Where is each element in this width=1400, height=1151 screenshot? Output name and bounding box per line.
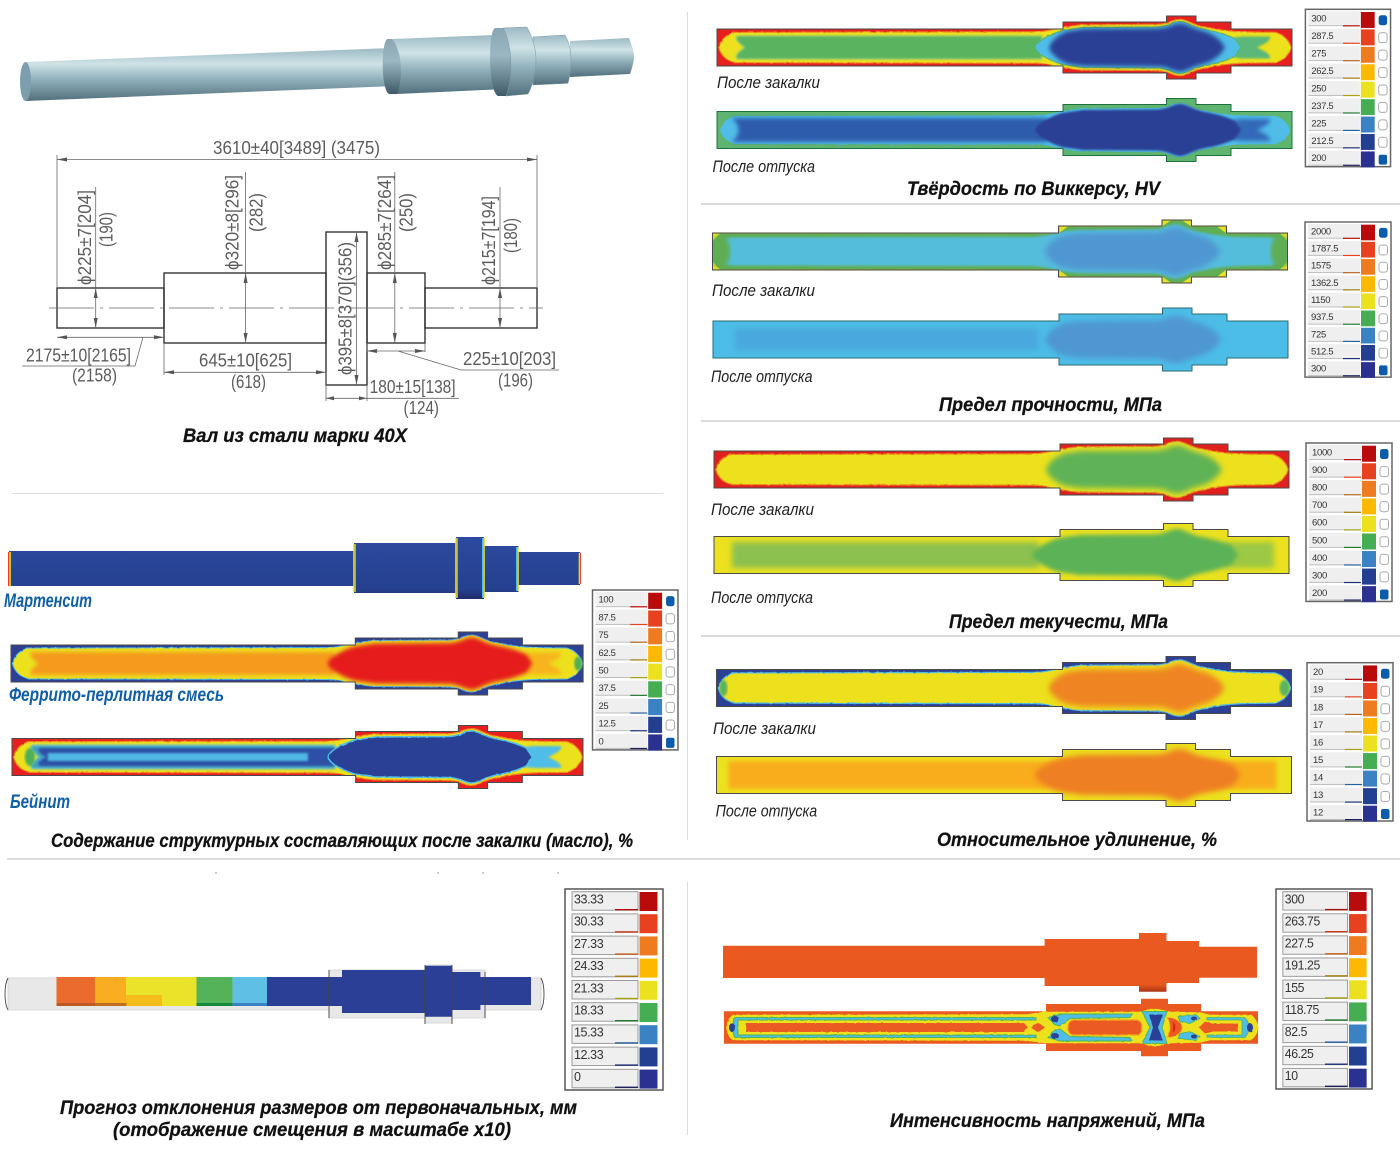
drawing outline — [49, 232, 543, 385]
legend: hardness: 275 — [1311, 48, 1326, 59]
map: yield strength after tempering — [714, 524, 1289, 586]
dimension labels: (190) — [96, 212, 116, 247]
dimension labels: ϕ285±7[264] — [375, 175, 395, 270]
legend: tensile strength: 725 — [1311, 328, 1326, 339]
map: elongation after tempering — [716, 744, 1292, 806]
legend: displacement: 33.33 — [574, 892, 604, 906]
dimension labels: 225±10[203] — [463, 349, 556, 369]
legend: structure percent: 62.5 — [598, 648, 616, 659]
dimension labels: (180) — [501, 218, 521, 253]
legend: stress intensity: 10 — [1285, 1069, 1298, 1083]
legend: hardness: 212.5 — [1311, 135, 1333, 146]
ghost of original shaft — [8, 965, 541, 1023]
map: stress intensity section — [724, 999, 1258, 1056]
legend: hardness — [1305, 9, 1391, 167]
map: elongation after quenching — [716, 656, 1292, 720]
legend: tensile strength: 1150 — [1311, 294, 1330, 305]
dimension labels: ϕ225±7[204] — [75, 190, 95, 285]
title: elongation: Относительное удлинение, % — [937, 830, 1217, 851]
legend: elongation: 20 — [1313, 667, 1323, 678]
legend: elongation: 14 — [1313, 772, 1323, 783]
legend: elongation: 15 — [1313, 755, 1323, 766]
legend: structure percent: 0 — [598, 736, 603, 747]
label: after quenching: После закалки — [712, 281, 815, 300]
map: tensile strength after tempering — [713, 308, 1288, 371]
legend: structure percent: 37.5 — [598, 683, 616, 694]
label: bainite: Бейнит — [10, 792, 70, 813]
legend: displacement: 0 — [574, 1070, 581, 1084]
legend: stress intensity: 118.75 — [1285, 1003, 1320, 1017]
legend: structure percent: 100 — [598, 595, 613, 606]
panel: martensite 3D map — [8, 537, 580, 599]
legend: yield strength: 500 — [1312, 535, 1327, 546]
legend: elongation — [1307, 663, 1393, 822]
legend: displacement: 27.33 — [574, 937, 604, 951]
dimension labels — [26, 138, 556, 418]
dimension labels: ϕ215±7[194] — [479, 196, 499, 285]
legend: yield strength: 1000 — [1312, 448, 1332, 459]
dimension labels: 645±10[625] — [199, 351, 292, 371]
legend: structure percent — [592, 590, 678, 751]
legend: stress intensity: 46.25 — [1285, 1047, 1314, 1061]
legend: structure percent: 12.5 — [598, 719, 616, 730]
dimension labels: 3610±40[3489] (3475) — [213, 138, 380, 158]
label: after quenching: После закалки — [713, 719, 816, 738]
legend: structure percent: 50 — [598, 665, 608, 677]
legend: yield strength: 400 — [1312, 553, 1327, 564]
legend: hardness: 200 — [1311, 152, 1326, 163]
legend: elongation: 13 — [1313, 790, 1323, 801]
map: tensile strength after quenching — [710, 220, 1290, 283]
subtitle: displacement scale: (отображение смещения в масштабе x10) — [113, 1120, 511, 1141]
label: after quenching: После закалки — [717, 73, 820, 92]
legend: yield strength — [1306, 443, 1392, 602]
dimension labels: (2158) — [72, 366, 117, 386]
title: shaft: Вал из стали марки 40Х — [183, 426, 408, 447]
label: after tempering: После отпуска — [711, 367, 812, 386]
map: bainite — [12, 726, 583, 788]
legend: yield strength: 200 — [1312, 588, 1327, 599]
legend: tensile strength: 937.5 — [1311, 311, 1333, 322]
legend: tensile strength — [1305, 222, 1391, 378]
map: displacement forecast — [5, 965, 544, 1024]
legend: hardness: 250 — [1311, 82, 1326, 93]
label: after quenching: После закалки — [711, 500, 814, 519]
map: hardness after quenching — [717, 16, 1292, 79]
legend: tensile strength: 300 — [1311, 363, 1326, 374]
legend: yield strength: 300 — [1312, 570, 1327, 581]
legend: tensile strength: 1362.5 — [1311, 277, 1338, 288]
panel: 3D shaft model — [20, 27, 634, 101]
legend: stress intensity: 82.5 — [1285, 1025, 1308, 1039]
legend: elongation: 19 — [1313, 685, 1323, 696]
legend: displacement: 18.33 — [574, 1004, 604, 1018]
title: structural constituents: Содержание структурных составляющих после закалки (масло), % — [51, 831, 633, 852]
legend: tensile strength: 1787.5 — [1311, 243, 1338, 253]
legend: hardness: 300 — [1311, 13, 1326, 24]
legend: elongation: 17 — [1313, 720, 1323, 731]
map: stress intensity exterior — [723, 933, 1257, 992]
legend: elongation: 12 — [1313, 807, 1323, 819]
legend: displacement: 15.33 — [574, 1026, 604, 1040]
legend: yield strength: 700 — [1312, 500, 1327, 511]
legend: stress intensity: 155 — [1285, 981, 1305, 995]
legend: structure percent: 87.5 — [598, 612, 616, 623]
dimension lines — [22, 155, 559, 401]
legend: hardness: 287.5 — [1311, 30, 1333, 41]
legend: tensile strength: 1575 — [1311, 260, 1331, 271]
legend: yield strength: 900 — [1312, 465, 1327, 476]
dimension labels: 2175±10[2165] — [26, 346, 131, 366]
label: after tempering: После отпуска — [711, 588, 813, 607]
dimension labels: (282) — [246, 193, 266, 232]
map: yield strength after quenching — [714, 438, 1289, 501]
legend: stress intensity: 263.75 — [1285, 914, 1320, 929]
legend: elongation: 16 — [1313, 737, 1323, 748]
legend: stress intensity: 227.5 — [1285, 937, 1314, 951]
legend: displacement: 12.33 — [574, 1048, 604, 1062]
title: tensile strength: Предел прочности, МПа — [939, 395, 1162, 416]
legend: structure percent: 25 — [598, 701, 608, 712]
legend: yield strength: 800 — [1312, 483, 1327, 494]
dimension labels: (124) — [404, 398, 439, 418]
legend: stress intensity: 191.25 — [1285, 959, 1320, 973]
panel: dimensioned drawing of the shaft — [22, 138, 559, 418]
displaced coloured shaft — [56, 966, 531, 1017]
label: ferrite-pearlite: Феррито-перлитная смесь — [9, 685, 224, 706]
legend: displacement: 21.33 — [574, 981, 604, 995]
legend: tensile strength: 2000 — [1311, 225, 1331, 236]
dimension labels: ϕ395±8[370](356) — [336, 242, 356, 375]
dimension labels: 180±15[138] — [370, 377, 456, 397]
dimension labels: ϕ320±8[296] — [222, 175, 242, 270]
title: hardness: Твёрдость по Виккерсу, HV — [907, 179, 1161, 200]
legend: hardness: 225 — [1311, 117, 1326, 128]
label: after tempering: После отпуска — [712, 157, 815, 176]
legend: displacement: 30.33 — [574, 915, 604, 929]
title: displacement forecast: Прогноз отклонения размеров от первоначальных, мм — [60, 1098, 577, 1119]
legend: elongation: 18 — [1313, 702, 1323, 713]
title: yield strength: Предел текучести, МПа — [949, 612, 1168, 633]
legend: displacement: 24.33 — [574, 959, 604, 973]
legend: yield strength: 600 — [1312, 518, 1327, 529]
legend: hardness: 237.5 — [1311, 100, 1333, 111]
legend: tensile strength: 512.5 — [1311, 346, 1333, 357]
map: hardness after tempering — [717, 98, 1292, 162]
dimension labels: (618) — [231, 372, 266, 392]
label: martensite: Мартенсит — [4, 591, 92, 612]
title: stress intensity: Интенсивность напряжений, МПа — [890, 1111, 1205, 1132]
legend: displacement — [565, 889, 663, 1090]
legend: structure percent: 75 — [598, 630, 608, 641]
legend: hardness: 262.5 — [1311, 65, 1333, 76]
label: after tempering: После отпуска — [716, 802, 817, 820]
legend: stress intensity — [1276, 889, 1372, 1089]
dimension labels: (196) — [498, 371, 533, 391]
dimension labels: (250) — [396, 193, 416, 232]
map: ferrite-pearlite mixture — [11, 632, 583, 695]
legend: stress intensity: 300 — [1285, 892, 1305, 906]
